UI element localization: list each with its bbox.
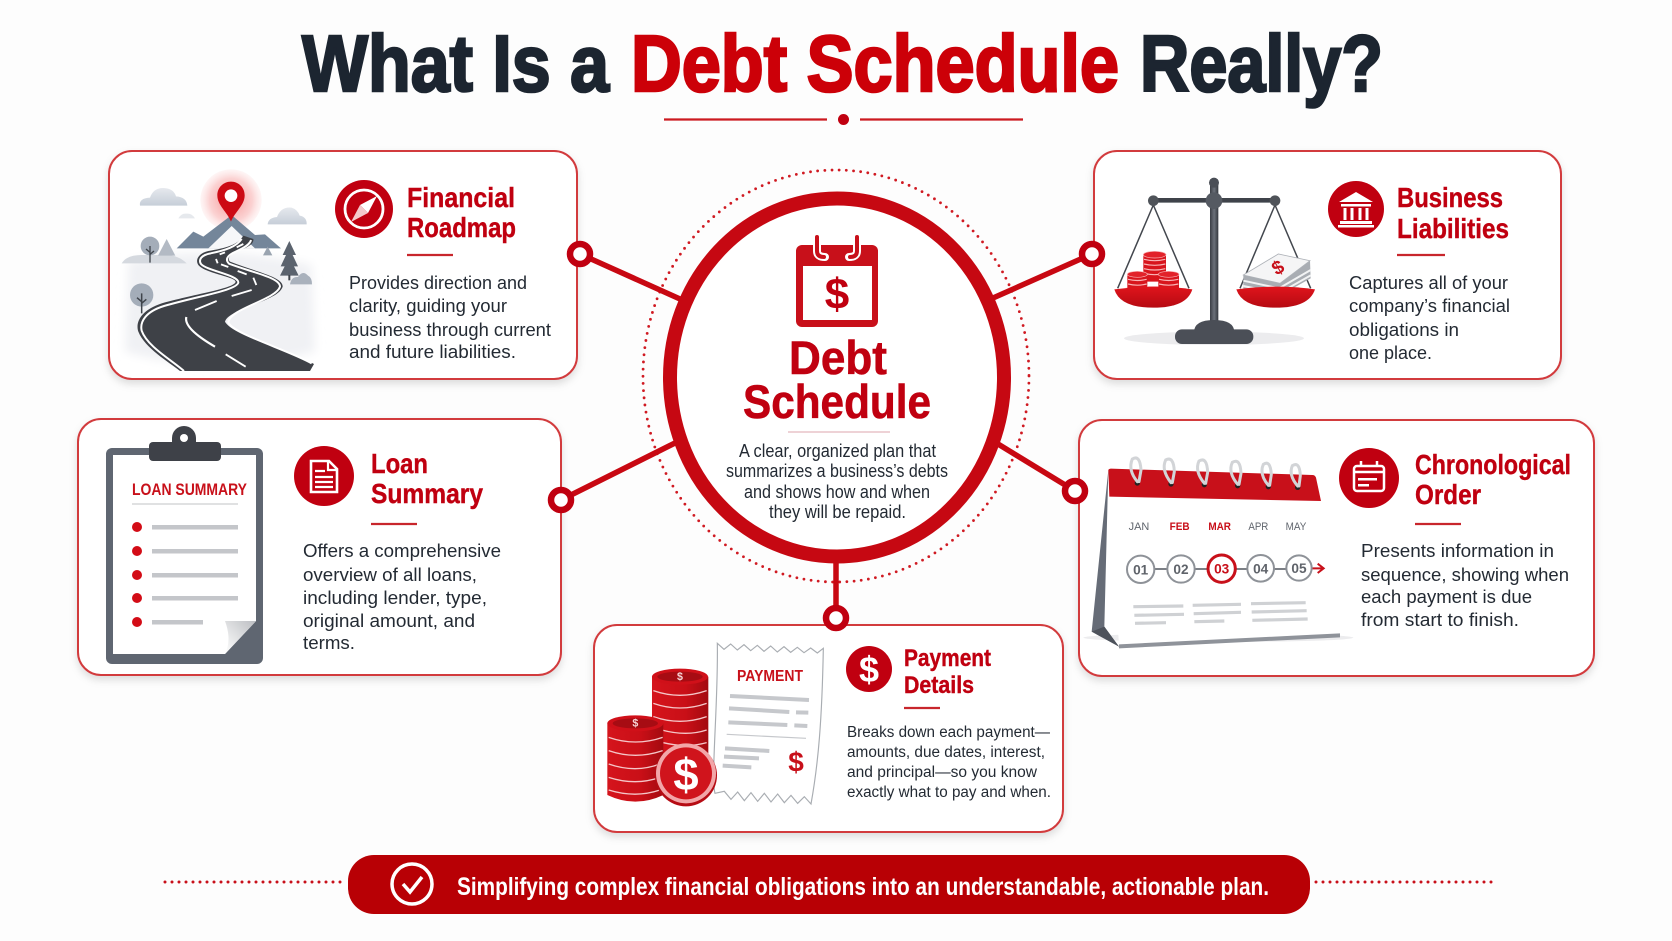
illustration: desk calendar: JAN [1129,521,1149,533]
panel: loan summary [78,419,561,675]
illustration: winding road to mountain pin [122,169,315,371]
heading: Roadmap [407,212,516,243]
heading: Business [1397,182,1503,213]
heading [1415,449,1571,510]
illustration: clipboard: LOAN SUMMARY [132,480,248,499]
description: Presents information in [1361,541,1554,561]
pans [1114,287,1192,308]
map pin [217,182,245,222]
title [302,19,1383,108]
callout: takeaway banner: Simplifying complex financial obligations into an understandable, actionable plan. [457,873,1269,901]
description: original amount, and [303,611,475,631]
centre ring [670,198,1004,556]
icon: calendar [1339,448,1399,508]
description: business through current [349,320,551,340]
connector nodes [551,244,1102,628]
heading [407,182,516,243]
heading: Summary [371,478,483,509]
description: and future liabilities. [349,342,516,362]
panel: business liabilities [1094,151,1561,379]
illustration: desk calendar: 02 [1173,562,1189,577]
illustration: coins and receipt [607,643,823,806]
illustration: coins and receipt: $ [673,749,699,800]
description: and principal—so you know [847,764,1038,781]
illustration: coins and receipt: $ [788,747,804,778]
centre description: A clear, organized plan that [739,441,936,461]
description [303,541,501,653]
centre description [726,441,948,522]
cash pile [1243,254,1311,296]
description: clarity, guiding your [349,296,507,316]
icon: dollar: $ [859,649,879,690]
title: Really? [1140,19,1383,108]
heading [1397,182,1509,244]
illustration: coins and receipt: $ [677,671,683,683]
icon: calendar with dollar: $ [825,270,849,319]
illustration: coins and receipt: $ [632,718,638,730]
icon: dollar [846,646,892,692]
title: Debt Schedule [631,19,1119,108]
illustration: desk calendar: 05 [1291,561,1307,576]
heading: Order [1415,479,1481,510]
heading: Details [904,672,974,699]
panel: financial roadmap [109,151,577,379]
dotted orbit around centre [643,170,1029,582]
connector lines [561,254,1092,618]
illustration: desk calendar: 04 [1253,561,1269,576]
heading: Financial [407,182,515,213]
description: exactly what to pay and when. [847,784,1051,801]
illustration: desk calendar: 01 [1133,562,1149,577]
illustration: desk calendar: 03 [1214,562,1230,577]
icon: calendar with dollar [796,237,878,327]
centre heading: Debt [789,331,887,384]
panel: chronological order [1079,420,1594,676]
description: obligations in [1349,320,1459,340]
description [847,724,1051,801]
heading: Loan [371,448,428,479]
description [1361,541,1569,630]
centre description: they will be repaid. [769,502,906,522]
description: from start to finish. [1361,610,1519,630]
illustration: balance scale: $ [1269,257,1289,280]
illustration: desk calendar: FEB [1170,521,1190,533]
description [349,273,551,362]
description: amounts, due dates, interest, [847,744,1045,761]
description: including lender, type, [303,588,487,608]
icon: compass [335,180,393,238]
callout: takeaway banner [348,855,1310,914]
illustration: desk calendar: MAY [1286,521,1307,533]
illustration: desk calendar: MAR [1208,521,1231,533]
heading [371,448,483,509]
icon: check mark [392,864,432,904]
title underline ornament [664,114,1023,125]
centre description: summarizes a business’s debts [726,461,948,481]
illustration: coins and receipt: PAYMENT [737,668,804,685]
bottom dotted rule left [165,880,346,884]
illustration: clipboard [106,426,263,664]
illustration: balance scale [1114,178,1315,345]
coin stacks [1143,253,1166,282]
description: Breaks down each payment— [847,724,1050,741]
heading: Payment [904,645,991,672]
centre description: and shows how and when [744,482,930,502]
title: What Is a [302,19,609,108]
illustration: desk calendar [1083,458,1353,648]
panel: payment details [594,625,1063,832]
description: sequence, showing when [1361,565,1569,585]
description: each payment is due [1361,587,1532,607]
illustration: desk calendar: APR [1248,521,1268,533]
centre heading [743,331,931,428]
bottom dotted rule right [1316,880,1497,884]
heading [904,645,991,699]
icon: document [294,446,354,506]
description: one place. [1349,343,1432,363]
description: overview of all loans, [303,565,477,585]
heading: Liabilities [1397,213,1509,244]
centre heading: Schedule [743,375,931,428]
description: Offers a comprehensive [303,541,501,561]
description [1349,273,1510,363]
heading: Chronological [1415,449,1571,480]
panel: centre debt schedule hub [670,198,1004,556]
icon: bank [1328,181,1384,237]
description: Captures all of your [1349,273,1508,293]
description: Provides direction and [349,273,527,293]
description: company’s financial [1349,296,1510,316]
description: terms. [303,633,355,653]
road surface [138,236,314,371]
